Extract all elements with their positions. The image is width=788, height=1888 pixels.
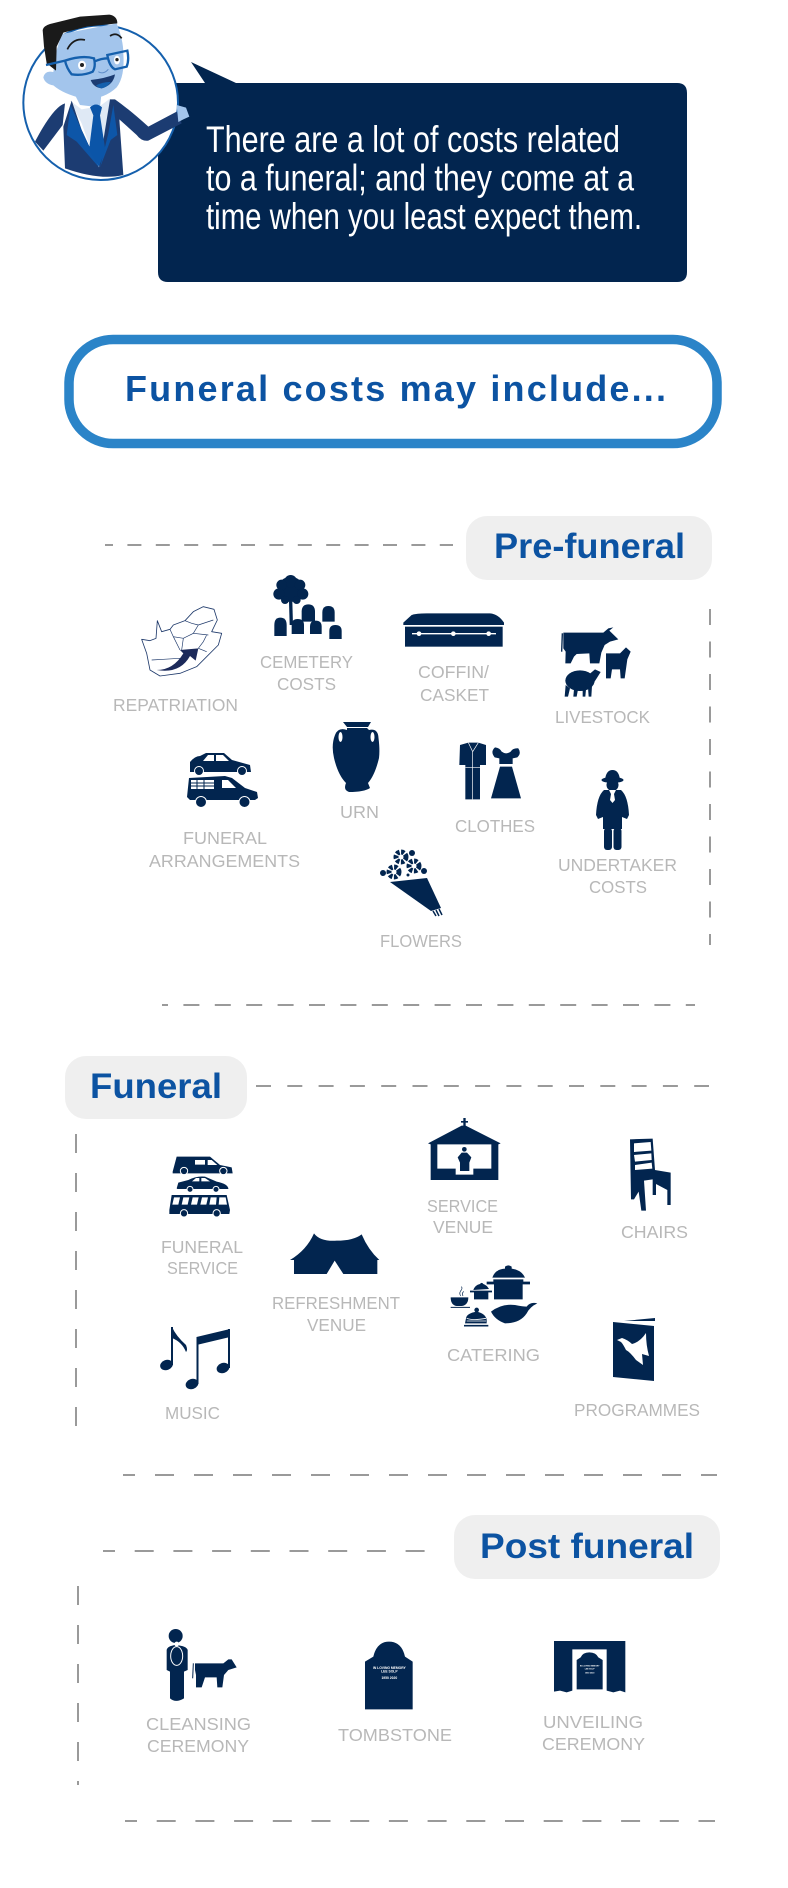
label: programmes: PROGRAMMES	[574, 1400, 700, 1420]
title pill: Funeral costs may include...	[125, 368, 666, 409]
label: funeral arrangements	[149, 828, 300, 871]
speech text: There are a lot of costs related	[206, 119, 620, 160]
icon: urn	[333, 722, 379, 792]
label: cemetery costs: CEMETERY	[260, 652, 353, 672]
label: refreshment venue: VENUE	[307, 1315, 366, 1335]
character: presenter in circle	[23, 15, 189, 180]
icon: coffin	[403, 613, 504, 647]
label: cleansing ceremony: CLEANSING	[146, 1714, 251, 1734]
label: music: MUSIC	[165, 1403, 220, 1423]
icon: livestock	[562, 627, 631, 697]
panel: pre-funeral	[105, 516, 712, 1005]
icon: tombstone: LEE SOLP	[381, 1670, 398, 1674]
label: clothes: CLOTHES	[455, 816, 535, 836]
icon: tombstone: 1950 2020	[381, 1676, 397, 1680]
label: service venue: SERVICE	[427, 1196, 498, 1216]
icon: flowers	[380, 850, 442, 916]
speech text: time when you least expect them.	[206, 196, 642, 237]
icon: chair	[630, 1139, 671, 1211]
label: flowers: FLOWERS	[380, 931, 462, 951]
icon: cemetery	[273, 575, 342, 639]
label: unveiling ceremony: UNVEILING	[543, 1712, 643, 1732]
heading: pre-funeral: Pre-funeral	[494, 527, 685, 566]
label: chairs: CHAIRS	[621, 1222, 688, 1242]
heading: funeral: Funeral	[90, 1067, 222, 1106]
icon: unveiling ceremony: 1950 2020	[585, 1672, 595, 1674]
icon: funeral arrangements cars	[187, 753, 258, 808]
icon: tombstone	[365, 1642, 413, 1709]
heading: pre-funeral	[466, 516, 712, 580]
label: refreshment venue: REFRESHMENT	[272, 1293, 400, 1313]
label: service venue	[427, 1196, 498, 1237]
label: undertaker costs: COSTS	[589, 877, 647, 897]
icon: funeral service vehicles	[169, 1157, 233, 1217]
label: service venue: VENUE	[433, 1217, 493, 1237]
label: cleansing ceremony: CEREMONY	[147, 1736, 249, 1756]
panel: post funeral	[78, 1515, 720, 1821]
label: livestock: LIVESTOCK	[555, 707, 650, 727]
label: unveiling ceremony: CEREMONY	[542, 1734, 645, 1754]
label: funeral arrangements: FUNERAL	[183, 828, 267, 848]
label: funeral service: SERVICE	[167, 1258, 238, 1278]
label: coffin/casket: CASKET	[420, 685, 489, 705]
icon: service venue	[428, 1118, 501, 1180]
speech bubble	[158, 62, 687, 282]
icon: programme with dove	[613, 1318, 655, 1381]
label: cleansing ceremony	[146, 1714, 251, 1756]
label: funeral arrangements: ARRANGEMENTS	[149, 851, 300, 871]
speech text	[206, 119, 642, 237]
title pill	[69, 340, 717, 444]
icon: tombstone: IN LOVING MEMORY	[373, 1666, 407, 1670]
icon: unveiling ceremony: IN LOVING MEMORY	[580, 1666, 600, 1668]
label: cemetery costs	[260, 652, 353, 694]
heading: post funeral	[454, 1515, 720, 1579]
label: refreshment venue	[272, 1293, 400, 1335]
label: cemetery costs: COSTS	[277, 674, 336, 694]
label: undertaker costs	[558, 855, 677, 897]
icon: cleansing ceremony	[167, 1629, 237, 1701]
icon: music notes	[159, 1327, 231, 1391]
label: funeral service: FUNERAL	[161, 1237, 243, 1257]
speech text: to a funeral; and they come at a	[206, 158, 634, 198]
icon: unveiling ceremony	[554, 1641, 625, 1692]
icon: catering	[451, 1265, 537, 1326]
label: funeral service	[161, 1237, 243, 1278]
icon: clothes	[459, 743, 521, 799]
label: unveiling ceremony	[542, 1712, 645, 1754]
icon: repatriation map	[142, 607, 222, 676]
label: coffin/casket: COFFIN/	[418, 662, 489, 682]
label: catering: CATERING	[447, 1345, 540, 1365]
label: undertaker costs: UNDERTAKER	[558, 855, 677, 875]
icon: undertaker	[596, 770, 629, 850]
heading: post funeral: Post funeral	[480, 1527, 694, 1566]
panel: funeral	[65, 1056, 717, 1475]
label: repatriation: REPATRIATION	[113, 695, 238, 715]
label: tombstone: TOMBSTONE	[338, 1725, 452, 1745]
label: urn: URN	[340, 802, 379, 822]
heading: funeral	[65, 1056, 247, 1119]
icon: unveiling ceremony: LEE SOLP	[585, 1669, 595, 1671]
label: coffin/casket	[418, 662, 489, 705]
icon: tent	[290, 1233, 379, 1274]
